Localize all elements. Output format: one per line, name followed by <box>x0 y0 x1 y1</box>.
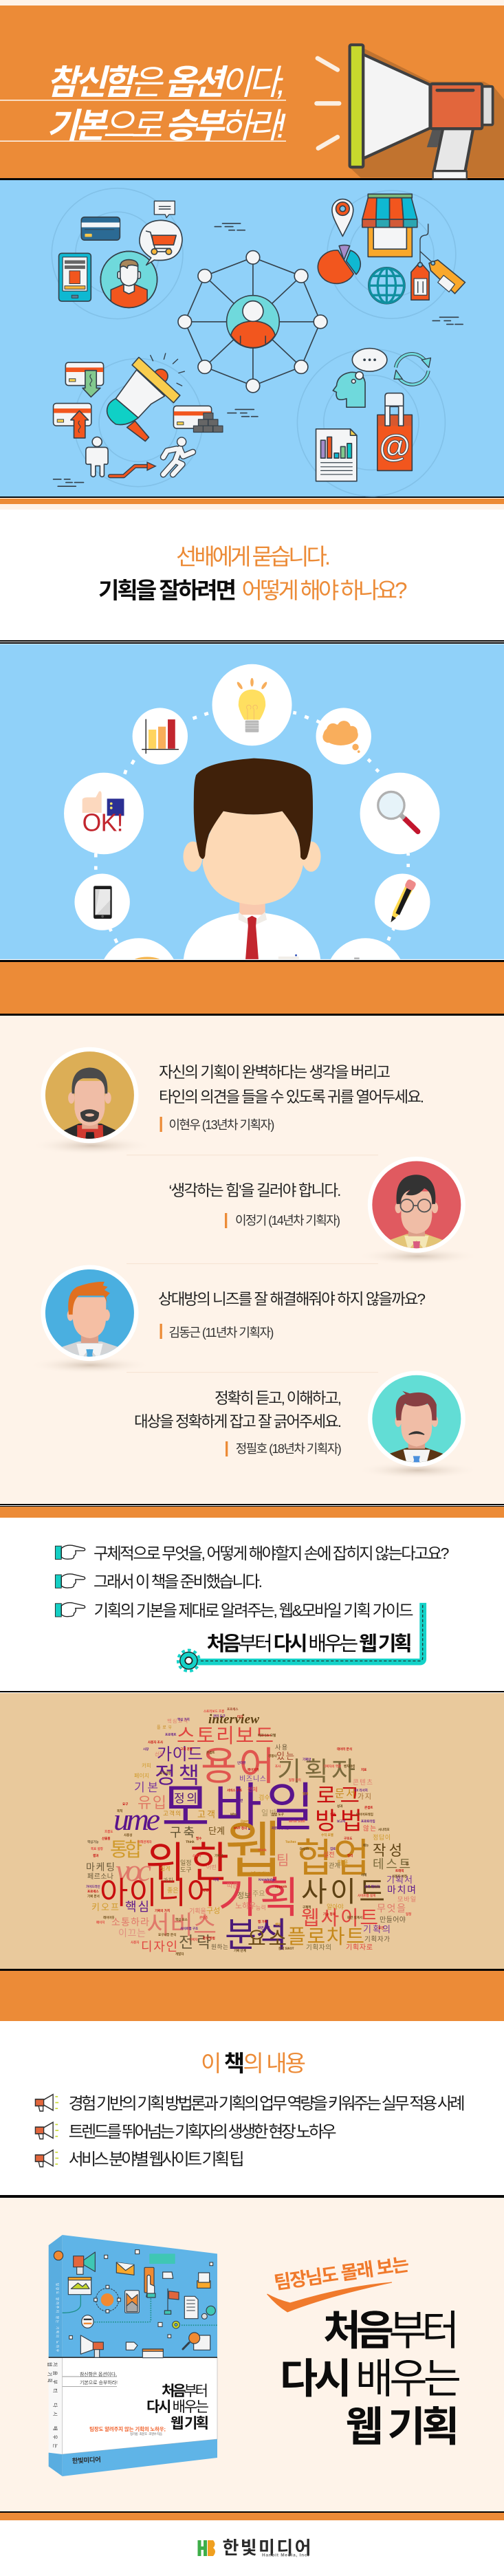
word cloud: 실전 <box>323 1850 335 1859</box>
book cover: 웹 기획 <box>47 2362 53 2383</box>
quote 3 <box>158 1291 426 1340</box>
tiny words texture: 화면 설계서 <box>347 1915 362 1920</box>
tiny words texture: 페이지 <box>96 1920 105 1925</box>
tiny words texture: 콘셉트 <box>364 1805 373 1810</box>
icon: pie chart <box>318 245 360 283</box>
avatar: Jeong Pilho <box>367 1371 465 1476</box>
word cloud: 핵심고객 <box>167 1718 188 1725</box>
word cloud: 분석 <box>225 1908 287 1957</box>
promo book title: 다시 배우는 <box>280 2356 461 2402</box>
tiny words texture: Write Stuff <box>289 1819 306 1824</box>
word cloud <box>86 1707 416 1957</box>
dividers <box>127 1155 378 1373</box>
tiny words texture: 레이아웃 <box>103 1915 115 1920</box>
tiny words texture: 기획자 <box>189 1937 198 1942</box>
icon: thought bubble <box>352 349 387 371</box>
tiny words texture: 사용자 <box>131 1940 140 1945</box>
contents list: 트렌드를 뛰어넘는 기획자의 생생한 현장 노하우 <box>69 2123 337 2141</box>
tiny words texture: 인터뷰 <box>237 1760 245 1765</box>
icon: pencil <box>391 878 417 922</box>
book cover: 처음부터 다시 배우는 <box>52 2362 58 2449</box>
panel: planner with idea circles <box>0 644 504 959</box>
publisher logo: Hanbit Media, Inc. <box>262 2553 309 2558</box>
heading: ask seniors <box>98 544 407 603</box>
word cloud: 만들어야 <box>380 1914 406 1924</box>
word cloud: 알아야 <box>327 1902 344 1911</box>
word cloud: 문서 <box>335 1786 355 1800</box>
word cloud: 기획자가 <box>364 1934 390 1943</box>
panel: book contents <box>35 2051 465 2169</box>
tiny words texture: 핵심 요소 <box>175 1917 188 1922</box>
promo book title <box>280 2308 461 2450</box>
tiny words texture: 스토리 <box>193 1853 201 1858</box>
quote 3: 상대방의 니즈를 잘 해결해줘야 하지 않을까요? <box>158 1291 426 1308</box>
tiny words texture: 검토 <box>330 1846 336 1851</box>
tiny words texture: 가이드라인 <box>86 1884 100 1889</box>
word cloud: 플로차트 <box>287 1921 364 1950</box>
tiny words texture: 앱 기획 <box>258 1919 267 1924</box>
quote 4: 정확히 듣고, 이해하고, <box>215 1390 342 1407</box>
heading: ask seniors: 선배에게 묻습니다. <box>176 544 331 569</box>
word cloud: 도구 <box>180 1865 192 1874</box>
word cloud: 스토리보드 <box>177 1720 274 1749</box>
word cloud: 일정 <box>180 1858 192 1867</box>
icon: megaphone <box>316 45 504 179</box>
tiny words texture: 관리 도구 <box>213 1714 226 1718</box>
word cloud: ume <box>113 1802 160 1837</box>
title: 참신함은 옵션이다, <box>47 63 286 102</box>
word cloud: 마케팅 <box>86 1860 115 1874</box>
tiny words texture <box>86 1707 411 1956</box>
book cover: 팀장도 알려주지 않는 기획의 노하우 <box>55 2283 60 2352</box>
word cloud: 카피 <box>142 1762 151 1769</box>
avatar: Kim Donggeun <box>41 1265 139 1370</box>
tiny words texture: 메뉴 <box>363 1843 369 1848</box>
word cloud: 사용 <box>275 1743 287 1751</box>
tiny words texture: 와이어프레임 <box>356 1812 373 1817</box>
quote 1: 이현우 (13년차 기획자) <box>168 1118 274 1132</box>
tiny words texture: 사용성 <box>124 1833 132 1837</box>
book cover: 기본으로 승부하라! <box>80 2379 118 2386</box>
icon: light bulb <box>236 678 268 732</box>
word cloud: 고객 <box>197 1807 215 1820</box>
word cloud: 않는 <box>363 1823 376 1833</box>
word cloud: 용어 <box>201 1735 275 1791</box>
panel: hero banner <box>0 45 504 179</box>
tiny words texture: UX 리서치 <box>354 1788 368 1793</box>
tiny words texture: 구조도 <box>344 1837 352 1841</box>
tiny words texture: 앱 <box>406 1862 408 1866</box>
tiny words texture: 흐름도 <box>105 1829 113 1834</box>
tiny words texture: Think <box>186 1840 195 1844</box>
word cloud: 소통하라 <box>111 1915 149 1929</box>
tiny words texture: 일정 <box>406 1912 411 1917</box>
word cloud: 전략 <box>179 1929 211 1952</box>
tiny words texture: 기획 단계 <box>234 1948 246 1953</box>
tiny words texture: 비즈니스 모델 <box>258 1733 276 1738</box>
panel: book promo <box>47 2235 461 2476</box>
tiny words texture: 필수 <box>196 1836 201 1841</box>
word cloud: 기획의 <box>363 1922 391 1935</box>
word cloud: interview <box>208 1712 259 1727</box>
quote 2 <box>168 1182 341 1228</box>
tiny words texture: 조사 <box>275 1764 281 1769</box>
quote 3: 김동근 (11년차 기획자) <box>168 1326 274 1340</box>
word cloud: 구축 <box>170 1823 195 1841</box>
word cloud: 페이지 <box>134 1772 149 1780</box>
tiny words texture: 구체적 <box>303 1905 311 1910</box>
word cloud: 일반 <box>261 1807 276 1818</box>
heading: ask seniors: 어떻게 해야 하나요? <box>242 578 407 603</box>
word cloud: 활용 <box>337 1858 349 1867</box>
icon: cart speech bubble <box>140 220 182 265</box>
tiny words texture: 목적 <box>117 1809 122 1813</box>
icon: growth arrow <box>110 462 155 476</box>
tiny words texture: 시장 <box>143 1747 149 1751</box>
icon: standing person <box>86 437 108 477</box>
word cloud: 기획자 <box>277 1750 355 1788</box>
word cloud: 기본 <box>134 1778 158 1795</box>
tiny words texture: 타깃 <box>237 1714 243 1719</box>
book cover: 한빛미디어 <box>72 2456 101 2465</box>
word cloud: 따른 <box>227 1881 239 1890</box>
word cloud: 비즈니스 <box>239 1773 266 1783</box>
word cloud: 핵심 <box>125 1897 149 1915</box>
icon: smartphone <box>59 253 91 301</box>
book cover: 처음부터 <box>162 2383 208 2399</box>
word cloud: 키오프 <box>91 1900 119 1913</box>
tiny words texture: 산출물 <box>102 1836 110 1841</box>
icon: big megaphone <box>107 353 184 441</box>
tiny words texture: 스토리보드 흐름 <box>204 1709 224 1714</box>
connector with gear <box>178 1603 423 1671</box>
word cloud: 모바일 <box>162 1765 314 1841</box>
tiny words texture: 성과 <box>337 1804 343 1809</box>
promo book title: 웹 기획 <box>345 2404 459 2450</box>
word cloud: 통합 <box>110 1835 142 1862</box>
word cloud: 기획자의 <box>306 1942 331 1952</box>
word cloud: 관계 <box>329 1861 340 1870</box>
tiny words texture: 프로토타입 <box>361 1819 375 1824</box>
tiny words texture: 데이터 분석 <box>337 1747 352 1751</box>
tiny words texture: 협업 도구 <box>272 1812 284 1817</box>
tiny words texture: 요구사항 <box>160 1771 171 1776</box>
icon: chat bubble <box>154 201 175 218</box>
quote 1 <box>159 1064 424 1132</box>
word cloud: 플로우 <box>157 1724 172 1730</box>
word cloud: 방법 <box>315 1802 362 1837</box>
tiny words texture: 프로세스 <box>87 1889 99 1894</box>
tiny words texture: 컨셉 <box>203 1888 208 1892</box>
illustration: man <box>183 758 321 963</box>
word cloud: 노하우 <box>235 1900 256 1911</box>
tiny words texture: 설득 <box>330 1812 336 1817</box>
word cloud: 웹사이트 <box>301 1902 378 1931</box>
word cloud: 콘텐츠 <box>353 1777 373 1787</box>
tiny words texture: 분석 방법 <box>203 1936 215 1941</box>
icon: shop <box>362 194 417 256</box>
quote 4: 정필호 (18년차 기획자) <box>236 1442 342 1456</box>
network diagram <box>178 251 327 393</box>
tiny words texture: 일정 관리 <box>289 1778 301 1782</box>
tiny words texture: 할까 <box>303 1791 309 1796</box>
tiny words texture: appeals <box>275 1885 287 1889</box>
quote 4 <box>134 1390 342 1456</box>
intro text: 기획의 기본을 제대로 알려주는, 웹&모바일 기획 가이드 <box>94 1602 414 1619</box>
tiny words texture: 목표 설정 <box>91 1846 103 1851</box>
tiny words texture: 사용자 여정 <box>392 1874 407 1879</box>
orange swoosh <box>267 2282 392 2312</box>
word cloud: 기획자로 <box>346 1941 373 1952</box>
tiny words texture: 시나리오 <box>378 1827 390 1832</box>
icon: document chart <box>316 429 357 481</box>
tiny words texture: Open <box>241 1820 249 1824</box>
book cover: 웹 기획 <box>171 2416 209 2432</box>
word cloud: 위한 <box>146 1828 229 1890</box>
word cloud: 모바일 <box>397 1895 416 1903</box>
word cloud: 정의 <box>174 1789 197 1806</box>
tiny words texture: Knowledge <box>259 1878 276 1882</box>
word cloud: 작성 <box>373 1840 402 1860</box>
word cloud: 어떤 <box>206 1864 217 1871</box>
icon: card with bricks <box>173 406 223 433</box>
word cloud: 아이디어 <box>100 1868 215 1912</box>
tiny words texture: 요구 <box>122 1802 128 1807</box>
tiny words texture: 프로젝트 <box>165 1732 177 1737</box>
tiny words texture: 콘텐츠 <box>199 1915 208 1920</box>
tiny words texture: 분석 SWOT <box>278 1946 294 1951</box>
contents list: 경험 기반의 기획 방법론과 기획의 업무 역량을 키워주는 실무 적용 사례 <box>69 2095 465 2113</box>
intro text: 구체적으로 무엇을, 어떻게 해야할지 손에 잡히지 않는다고요? <box>94 1544 450 1562</box>
tiny words texture: 트래픽 <box>395 1868 404 1873</box>
quote 4: 대상을 정확하게 잡고 잘 긁어주세요. <box>134 1413 342 1430</box>
tiny words texture: 요건 <box>378 1925 384 1930</box>
tiny words texture: Tuches <box>285 1840 296 1844</box>
intro text <box>94 1544 450 1619</box>
tiny words texture: 경쟁사 <box>268 1754 277 1758</box>
tiny words texture: 핵심기능 <box>87 1840 99 1844</box>
icon: thumbs up OK <box>83 791 124 831</box>
book cover: 참신함은 옵션이다, <box>80 2371 117 2377</box>
icon: magnifier <box>378 792 418 831</box>
tiny words texture: 상세 페이지 <box>364 1884 380 1889</box>
book cover <box>47 2235 217 2476</box>
handwritten tagline: 팀장님도 몰래 보는 <box>273 2254 410 2293</box>
tiny words texture: 채널 <box>275 1922 281 1927</box>
word cloud: 고객의 <box>163 1809 181 1818</box>
word cloud: voc <box>116 1853 151 1888</box>
quote 1: 자신의 기획이 완벽하다는 생각을 버리고 <box>159 1064 391 1081</box>
quote 2: ‘생각하는 힘’을 길러야 합니다. <box>168 1182 341 1199</box>
word cloud: 유입 <box>138 1791 166 1813</box>
word cloud: 주요 <box>252 1888 265 1898</box>
icon: customer avatar <box>100 251 157 314</box>
panel: senior planner quotes <box>29 1047 479 1479</box>
avatar: Lee Hyunwoo <box>41 1047 139 1151</box>
icon: running person <box>163 437 193 474</box>
tiny words texture: 수익 모델 <box>321 1833 333 1837</box>
tiny words texture: 화면 <box>237 1798 243 1803</box>
tiny words texture: Depth <box>300 1847 309 1851</box>
word cloud: 능력 <box>256 1904 266 1912</box>
word cloud: 선정 <box>155 1751 164 1758</box>
tiny words texture: 커뮤니케이션 <box>272 1826 289 1831</box>
publisher logo: 한빛미디어 <box>223 2537 311 2558</box>
word cloud: 로그 <box>316 1778 360 1809</box>
icons: pointing hands <box>55 1545 85 1617</box>
tiny words texture: Why <box>230 1813 237 1817</box>
word cloud: 전체 <box>248 1786 258 1793</box>
book cover: 다시 배우는 <box>146 2399 209 2415</box>
contents list <box>69 2095 465 2169</box>
tiny words texture: 기획의 가치 <box>155 1908 170 1913</box>
tiny words texture: Think <box>258 1848 267 1853</box>
word cloud: 기획서 <box>386 1873 413 1886</box>
icon: location pin <box>332 199 353 237</box>
icon: price tags <box>411 224 465 300</box>
tiny words texture: 결과 <box>93 1853 99 1858</box>
word cloud: 마치며 <box>387 1883 416 1897</box>
word cloud: 서비스 <box>146 1904 217 1941</box>
promo book title: 처음부터 <box>323 2308 459 2354</box>
tiny words texture: 보고서 <box>337 1819 345 1824</box>
word cloud: 사이트 <box>301 1868 385 1910</box>
quote 2: 이정기 (14년차 기획자) <box>235 1214 340 1227</box>
tiny words texture: 기획서 <box>215 1853 223 1858</box>
tiny words texture: 이해 <box>213 1877 219 1882</box>
icon: cloud thought <box>322 721 360 753</box>
tiny words texture: 벤치마킹 <box>344 1764 355 1769</box>
book title line: 처음부터 다시 배우는 웹 기획 <box>207 1633 413 1655</box>
icon: thinking head <box>333 372 365 407</box>
heading: ask seniors: 기획을 잘하려면 <box>98 578 237 603</box>
title <box>0 63 286 145</box>
tiny words texture: 사이트맵 구조 <box>180 1926 198 1931</box>
book cover: 팀장도 알려주지 않는 기획의 노하우; <box>89 2425 166 2432</box>
tiny words texture: 콘셉트 <box>206 1750 215 1755</box>
title: 기본으로 승부하라! <box>47 107 286 145</box>
icon: card down <box>65 362 104 397</box>
word cloud: 이끄는 <box>118 1926 146 1940</box>
icon: bar chart <box>142 719 179 754</box>
icon: credit card <box>81 217 120 240</box>
icons: list megaphones <box>35 2095 58 2167</box>
icon: HB mark <box>198 2540 215 2556</box>
tiny words texture: 지표 <box>361 1767 366 1772</box>
panel: blue illustration <box>52 188 465 496</box>
tiny words texture: Information <box>251 1870 270 1875</box>
word cloud: 요소 <box>248 1923 287 1952</box>
intro text: 그래서 이 책을 준비했습니다. <box>94 1573 263 1591</box>
tiny words texture: 화면 흐름 <box>258 1925 270 1930</box>
word cloud: 팀 <box>276 1849 289 1869</box>
avatar: Lee Jeonggi <box>367 1157 465 1261</box>
tiny words texture: 기획 문서 <box>87 1894 100 1899</box>
word cloud: 기획을 <box>189 1906 206 1915</box>
icon: shopping bag: @ <box>379 428 410 463</box>
word cloud: 정책 <box>155 1757 199 1790</box>
tiny words texture: 사이트맵 설계 <box>358 1893 375 1898</box>
word cloud: 페르소나 <box>87 1870 113 1881</box>
icon: card up <box>54 404 91 438</box>
icon: globe <box>369 268 405 304</box>
icon: phone <box>94 886 112 919</box>
book cover: 정기범 · 최문호 · 조영수 지음 <box>130 2432 162 2436</box>
word cloud: 원하는 <box>211 1943 228 1951</box>
word cloud: 테스트 <box>373 1855 410 1873</box>
tiny words texture: 고객 경험 <box>180 1747 193 1751</box>
tiny words texture: 기획자의 역할 <box>323 1764 341 1769</box>
word cloud: 웹 <box>225 1800 282 1890</box>
icon: thumbs up OK: OK! <box>83 808 124 836</box>
tiny words texture: 기획안 <box>303 1757 311 1762</box>
word cloud: 무엇을 <box>377 1901 406 1915</box>
icon: shopping bag <box>377 393 412 470</box>
tiny words texture: 프로세스 <box>227 1707 239 1712</box>
tiny words texture: 이해관계자 <box>138 1840 153 1844</box>
panel: book intro lines <box>55 1544 450 1671</box>
word cloud: 가치 <box>163 1877 173 1884</box>
tiny words texture: 개발자 <box>175 1952 184 1956</box>
tiny words texture: 정리 <box>347 1853 353 1858</box>
word cloud: 좋은 <box>167 1886 179 1895</box>
heading: book contents: 이 책의 내용 <box>201 2051 306 2076</box>
word cloud: 검수 <box>259 1793 270 1802</box>
word cloud: 단계 <box>208 1824 225 1837</box>
icon: clipped lower circles <box>135 957 360 959</box>
tiny words texture: 페이지뷰 <box>248 1767 259 1772</box>
tiny words texture: 핵심 가치 <box>177 1717 190 1722</box>
tiny words texture: 사례 <box>361 1873 366 1877</box>
word cloud: 가이드 <box>157 1740 203 1765</box>
word cloud: 디자인 <box>141 1937 177 1955</box>
word cloud: 협업 <box>296 1826 370 1884</box>
quote 1: 타인의 의견을 들을 수 있도록 귀를 열어두세요. <box>159 1089 424 1106</box>
word cloud: 있는 <box>276 1749 294 1762</box>
word cloud: 정보 <box>237 1890 251 1901</box>
word cloud: 구성 <box>206 1905 220 1916</box>
tiny words texture: 요구사항 분석 <box>158 1932 176 1937</box>
word cloud: 설계 <box>160 1865 171 1873</box>
contents list: 서비스 분야별 웹사이트 기획 팁 <box>69 2150 245 2169</box>
tiny words texture: 서비스 구조 <box>227 1788 242 1793</box>
word cloud: 가지 <box>358 1791 371 1801</box>
word cloud: 기획 <box>218 1863 299 1925</box>
word cloud: 정답이 <box>373 1833 391 1842</box>
icon: cycle arrows <box>394 354 430 384</box>
tiny words texture: MVP 정의 <box>234 1826 247 1831</box>
tiny words texture: 사용자 조사 <box>148 1740 164 1745</box>
tiny words texture: 기능 정의 <box>323 1912 336 1917</box>
